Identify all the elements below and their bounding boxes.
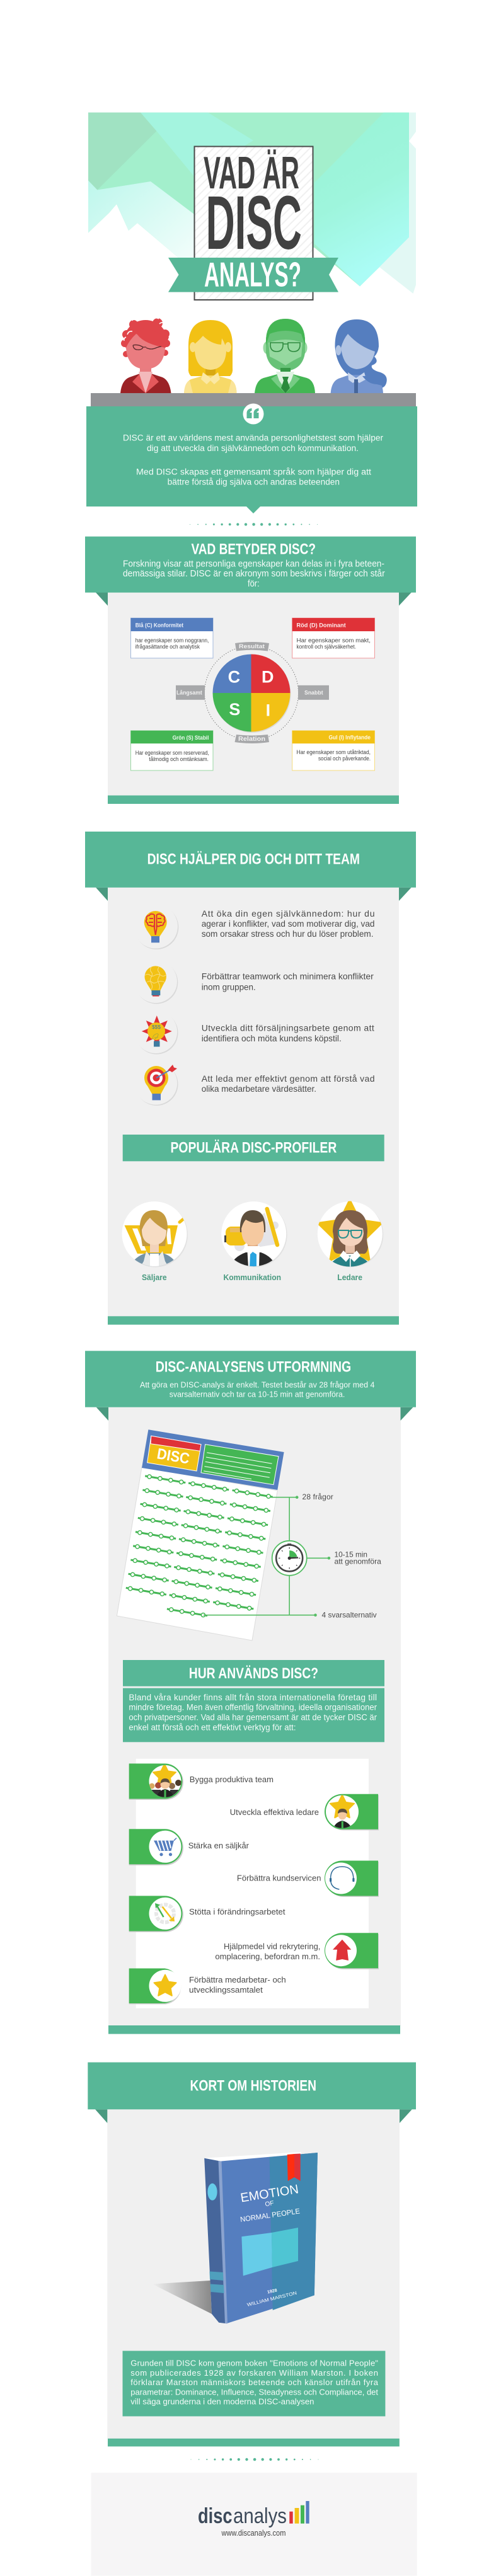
item: stärka en säljkår [129, 1829, 250, 1865]
connector lines [204, 1496, 330, 1617]
section: vad betyder disc [85, 537, 416, 804]
book title: EMOTION [239, 2182, 299, 2205]
illustration: book [153, 2152, 318, 2323]
label: 10-15 min: att genomföra [334, 1557, 381, 1566]
item: förbättra medarbetarsamtal: Förbättra medarbetar- och [189, 1975, 286, 1984]
intro text [140, 1381, 375, 1399]
title block [168, 146, 338, 300]
heading: KORT OM HISTORIEN [190, 2078, 316, 2094]
question rows [125, 1474, 273, 1618]
card: blue C: har egenskaper som noggrann, [135, 638, 209, 644]
icon: puzzle bulb [134, 960, 178, 1004]
text block: history: som publicerades 1928 av forskaren William Marston. I boken [130, 2368, 378, 2378]
person: blue [331, 319, 387, 393]
text block: customers: och privatpersoner. Vad alla har gemensamt är att de tycker DISC är [129, 1713, 377, 1722]
card: yellow I: social och påverkande. [318, 755, 371, 762]
text block: history: förklarar Marston människors beteende och känslor utifrån fyra [130, 2378, 379, 2387]
text block: history: Grunden till DISC kom genom boken "Emotions of Normal People" [130, 2359, 378, 2368]
text: self knowledge: agerar i konflikter, vad som motiverar dig, vad [202, 919, 374, 929]
logo: analys [233, 2504, 287, 2528]
item: utveckla effektiva ledare [230, 1794, 379, 1830]
panel background [108, 887, 399, 1317]
website url: www.discanalys.com [221, 2528, 285, 2538]
heading: DISC HJÄLPER DIG OCH DITT TEAM [147, 850, 360, 867]
icon: stopwatch [272, 1541, 307, 1576]
card: yellow I: Har egenskaper som utåtriktad, [296, 749, 371, 755]
logo: disc [198, 2504, 233, 2528]
card: red D [292, 618, 374, 658]
icon: sales bulb [134, 1010, 178, 1055]
label: resultat: Resultat [239, 643, 265, 650]
text block: customers: enkel att förstå och ett effektivt verktyg för att: [129, 1722, 296, 1732]
label: 4 svarsalternativ: 4 svarsalternativ [321, 1610, 377, 1619]
person: yellow [184, 320, 237, 393]
text: self knowledge [202, 908, 374, 939]
section: disc-analysens utformning [85, 1351, 416, 2034]
header band [85, 1351, 416, 1407]
label: snabbt [298, 685, 329, 700]
illustration: four DISC people [120, 318, 387, 393]
text: sales [202, 1022, 374, 1043]
subheading band: populära disc-profiler [123, 1135, 384, 1161]
panel background [108, 1407, 401, 2026]
item: stärka en säljkår: Stärka en säljkår [188, 1841, 250, 1850]
text: teamwork [202, 971, 374, 992]
card: yellow I: Gul (I) Inflytande [329, 735, 371, 741]
footer panel [91, 2473, 417, 2575]
book title: 1928 [267, 2288, 277, 2295]
item: förbättra medarbetarsamtal [129, 1968, 286, 2005]
intro text: DISC är ett av världens mest använda personlighetstest som hjälper [123, 433, 384, 442]
text: sales: Utveckla ditt försäljningsarbete genom att [202, 1022, 374, 1033]
subheading band: populära disc-profiler: POPULÄRA DISC-PROFILER [170, 1139, 337, 1156]
desk bar [91, 393, 416, 406]
card: green S: Grön (S) Stabil [173, 735, 209, 741]
ribbon folds [95, 2109, 412, 2123]
bottom strip [108, 2439, 400, 2446]
intro text [123, 433, 384, 486]
icon: sales bulb: $$$ [152, 1024, 161, 1030]
label: långsamt [176, 685, 205, 700]
text: self knowledge: Att öka din egen självkännedom: hur du [202, 908, 374, 919]
label: snabbt: Snabbt [304, 689, 323, 696]
chart: disc wheel [204, 646, 299, 740]
intro text [123, 559, 385, 589]
intro text: Att göra en DISC-analys är enkelt. Testet består av 28 frågor med 4 [140, 1381, 375, 1390]
icon: brain bulb [134, 905, 178, 949]
card: red D: Röd (D) Dominant [296, 622, 346, 629]
label: 10-15 min [334, 1550, 381, 1566]
panel: intro [86, 403, 417, 513]
card: green S: Har egenskaper som reserverad, [135, 750, 209, 756]
intro text: svarsalternativ och tar ca 10-15 min att genomföra. [170, 1390, 345, 1399]
text: teamwork: Förbättrar teamwork och minimera konflikter [202, 971, 374, 982]
book title: NORMAL PEOPLE [239, 2207, 301, 2224]
item: bygga produktiva team [129, 1763, 274, 1800]
intro text: för: [248, 579, 260, 589]
card: green S [131, 731, 213, 770]
intro text: Med DISC skapas ett gemensamt språk som hjälper dig att [136, 467, 371, 477]
intro text: bättre förstå dig själva och andras beteenden [168, 478, 340, 486]
divider dots [190, 523, 318, 526]
item: stötta i förändringsarbetet: Stötta i förändringsarbetet [189, 1907, 285, 1916]
title line: analys: ANALYS? [204, 256, 301, 294]
card: red D: Har egenskaper som makt, [296, 638, 371, 644]
title line: vad är: VAD ÄR [204, 147, 299, 198]
text block: customers [123, 1688, 384, 1742]
text block: customers: Bland våra kunder finns allt från stora internationella företag till [129, 1693, 377, 1702]
item: förbättra kundservicen: Förbättra kundservicen [237, 1874, 321, 1883]
bottom strip [108, 1316, 399, 1325]
card: blue C: ifrågasättande och analytisk [135, 643, 200, 650]
profile: säljare [122, 1201, 188, 1282]
chart: disc wheel: I [266, 701, 270, 719]
item: hjälpmedel vid rekrytering: omplacering, befordran m.m. [215, 1952, 320, 1961]
card: blue C: Blå (C) Konformitet [135, 622, 184, 629]
ribbon folds [96, 592, 412, 606]
profile: säljare: Säljare [142, 1273, 167, 1282]
profile: kommunikation: Kommunikation [223, 1273, 281, 1282]
title ribbon [168, 258, 338, 292]
illustration: questionnaire [117, 1429, 284, 1640]
heading: DISC-ANALYSENS UTFORMNING [156, 1359, 351, 1376]
intro text: dig att utveckla din självkännedom och kommunikation. [147, 444, 359, 453]
icon: target bulb [134, 1062, 178, 1106]
intro text: Forskning visar att personliga egenskaper kan delas in i fyra beteen- [123, 559, 384, 569]
text: sales: identifiera och möta kundens köpstil. [202, 1033, 342, 1043]
text block: history [122, 2351, 385, 2417]
panel: uses list [136, 1759, 369, 2008]
header band [85, 537, 416, 593]
label: 10-15 min: 10-15 min [334, 1550, 367, 1559]
card: yellow I [292, 731, 374, 770]
item: hjälpmedel vid rekrytering [215, 1933, 379, 1969]
icon: quote [243, 403, 263, 425]
label: relation: Relation [238, 736, 265, 743]
text block: history: vill säga grunderna i den moderna DISC-analysen [130, 2397, 314, 2407]
ribbon folds [96, 888, 412, 901]
panel background [107, 2109, 400, 2439]
intro text: demässiga stilar. DISC är en akronym som beskrivs i färger och står [123, 569, 385, 579]
text: leadership: Att leda mer effektivt genom att förstå vad [202, 1073, 374, 1084]
person: red [120, 318, 171, 393]
text block: customers: mindre företag. Men även offentlig förvaltning, ideella organisationer [129, 1703, 377, 1712]
card: green S: tålmodig och omtänksam. [149, 756, 209, 762]
book title [239, 2182, 301, 2308]
subheading band: hur används disc [123, 1660, 384, 1686]
book title: OF [265, 2200, 274, 2208]
item: utveckla effektiva ledare: Utveckla effektiva ledare [230, 1807, 319, 1817]
illustration: questionnaire: DISC [156, 1445, 191, 1468]
text: leadership [202, 1073, 374, 1094]
item: förbättra medarbetarsamtal: utvecklingssamtalet [189, 1985, 263, 1995]
item: hjälpmedel vid rekrytering: Hjälpmedel vid rekrytering, [224, 1942, 320, 1951]
item: bygga produktiva team: Bygga produktiva team [190, 1775, 274, 1784]
label: långsamt: Långsamt [176, 689, 202, 696]
text: self knowledge: som orsakar stress och hur du löser problem. [202, 929, 373, 939]
panel background [108, 592, 399, 796]
chart: disc wheel: C [228, 668, 240, 687]
book title: WILLIAM MARSTON [246, 2290, 297, 2308]
bottom strip [108, 2025, 400, 2034]
header band [85, 832, 416, 888]
card: blue C [131, 618, 213, 658]
text block: history: parametrar: Dominance, Influence, Steadyness och Compliance, det [130, 2387, 378, 2396]
person: green [255, 319, 315, 393]
profile: ledare [318, 1200, 383, 1282]
card: red D: kontroll och självsäkerhet. [296, 643, 356, 650]
section: kort om historien [88, 2063, 416, 2446]
text: teamwork: inom gruppen. [202, 982, 256, 992]
title line: disc: DISC [206, 180, 302, 265]
divider dots [190, 2458, 319, 2461]
logo [198, 2501, 309, 2528]
chart: disc wheel: S [229, 700, 240, 719]
label: 28 frågor: 28 frågor [302, 1492, 333, 1501]
item: stötta i förändringsarbetet [129, 1896, 285, 1932]
title box [194, 146, 313, 300]
label: relation [234, 735, 269, 743]
label: resultat [235, 642, 269, 651]
profile: ledare: Ledare [337, 1273, 362, 1282]
hero background [88, 113, 416, 294]
ribbon folds [96, 1407, 413, 1421]
bottom strip [108, 796, 399, 804]
subheading band: hur används disc: HUR ANVÄNDS DISC? [189, 1665, 318, 1682]
header band [88, 2063, 416, 2109]
chart: disc wheel: D [262, 668, 274, 687]
heading: VAD BETYDER DISC? [192, 541, 316, 558]
section: disc hjälper dig och ditt team [85, 832, 416, 1325]
item: förbättra kundservicen [237, 1861, 379, 1897]
text: leadership: olika medarbetare värdesätter. [202, 1084, 316, 1094]
profile: kommunikation [221, 1201, 287, 1282]
